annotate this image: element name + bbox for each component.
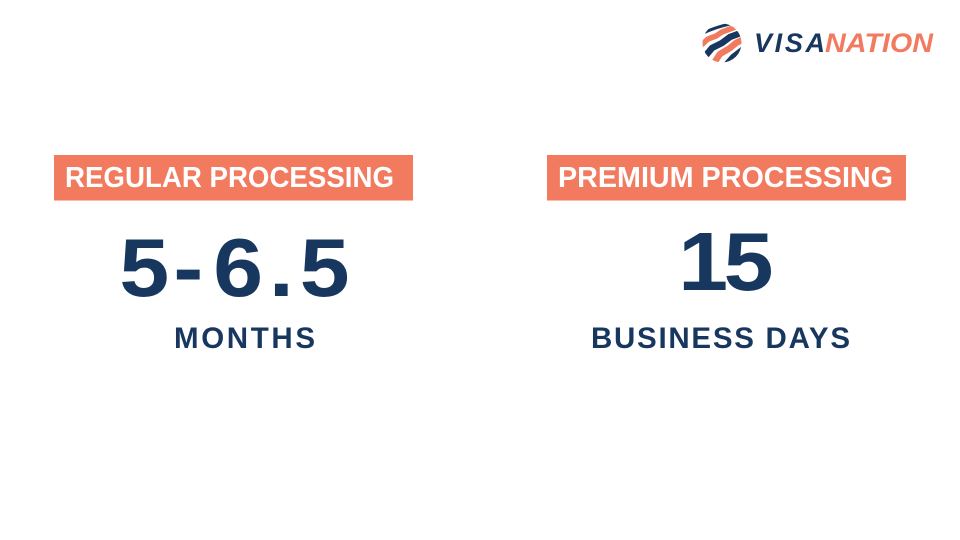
heading: regular processing: REGULAR PROCESSING (65, 162, 394, 194)
heading: premium processing: PREMIUM PROCESSING (558, 162, 893, 194)
panel: premium processing (547, 155, 906, 355)
panel: regular processing (54, 155, 413, 355)
heading: premium processing (547, 155, 906, 200)
icon: striped globe (702, 24, 742, 62)
number: 5-6.5: 5-6.5 (119, 222, 350, 314)
label: business days: BUSINESS DAYS (591, 322, 850, 355)
wordmark: NATION: NATION (825, 28, 934, 58)
number: 15: 15 (678, 216, 773, 308)
label: months: MONTHS (174, 322, 315, 355)
logo: Visa Nation (699, 24, 934, 66)
wordmark: VISA: VISA (754, 28, 825, 58)
heading: regular processing (54, 155, 413, 200)
